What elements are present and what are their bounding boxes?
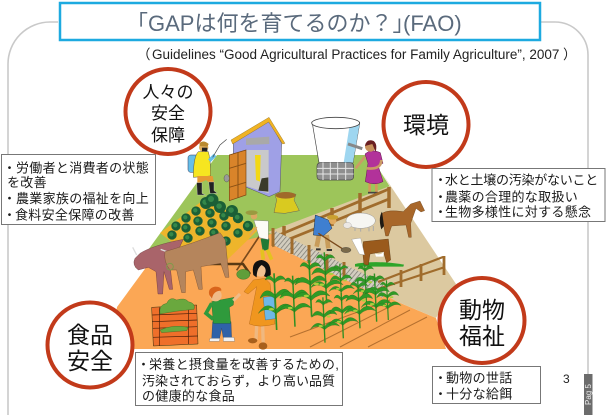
text box: food: 栄養と摂食量を改善するための, [149,357,339,372]
circle: animal welfare [440,278,524,363]
text box: people: 食料安全保障の改善 [15,208,135,222]
text box: environment: 水と土壌の汚染がないこと [445,172,598,188]
boy [206,287,240,341]
text box: food [136,352,342,406]
title text: 「GAPは何を育てるのか？」 [126,11,414,36]
farm ground [110,155,456,349]
circle: environment [384,82,468,167]
text box: food: ・ [137,357,150,372]
text box: environment [432,168,605,222]
shed [229,117,285,201]
crop field with cabbages [160,194,258,262]
lower right fence [378,256,445,289]
text box: animals: 十分な給餌 [446,386,513,402]
circle: animal welfare: 福祉 [459,317,505,351]
page tag [584,374,593,415]
title text: (FAO) [403,11,462,36]
text box: animals: ・ [434,370,447,386]
cow with grass [352,238,404,267]
page tag: Pag 5 [584,384,593,405]
woman at tank [356,140,383,193]
circle: people's security: 人々の [142,78,194,103]
standing farmer with plough [237,210,272,270]
crate of vegetables [152,299,198,346]
circle: food safety [48,302,132,388]
text box: people: ・ [3,160,16,176]
circle: environment: 環境 [403,106,449,140]
subtitle source: Guidelines “Good Agricultural Practices for Family Agriculture”, 2007 [152,47,559,62]
text box: animals: 動物の世話 [446,370,513,386]
circle: people's security: 安全 [151,99,185,124]
text box: people: ・ [3,208,16,222]
text box: people: を改善 [7,175,47,190]
plough beam [208,264,250,274]
subtitle source: （ [137,47,150,62]
title box [60,3,540,40]
mesh fence [273,228,383,298]
maroon ox [133,239,183,294]
circle: food safety: 安全 [67,342,113,376]
furrow lines [290,300,427,347]
text box: people: 農業家族の福祉を向上 [16,191,149,206]
text box: environment: 生物多様性に対する懸念 [445,204,591,220]
sheep [343,213,375,232]
brown ox [161,233,229,293]
text box: animals: ・ [434,386,447,402]
page number: 3 [563,372,570,386]
text box: animals [432,366,540,404]
text box: food: の健康的な食品 [142,388,235,404]
text box: people: 労働者と消費者の状態 [16,160,149,176]
beige paddock [268,173,456,318]
orange ground [110,232,446,349]
text box: food: 汚染されておらず，より高い品質 [142,374,335,388]
wooden fence upper [272,187,389,248]
corn plants [258,252,401,343]
text box: environment: ・ [434,204,447,220]
subtitle source: ） [563,47,576,62]
sprayer worker [188,139,229,195]
text box: environment: 農薬の合理的な取扱い [445,190,578,204]
circle: food safety: 食品 [67,316,113,350]
circle: people's security: 保障 [151,121,185,146]
water tank [312,117,362,180]
text box: people [2,154,156,224]
woman with greens [237,260,275,350]
circle: animal welfare: 動物 [459,291,505,325]
fertilizer sack [274,192,299,213]
text box: environment: ・ [434,172,447,188]
text box: environment: ・ [434,190,447,204]
circle: people's security [126,69,210,154]
green ground [135,155,392,268]
hoeing farmer [313,215,351,253]
text box: people: ・ [3,191,16,206]
horse [380,201,425,237]
